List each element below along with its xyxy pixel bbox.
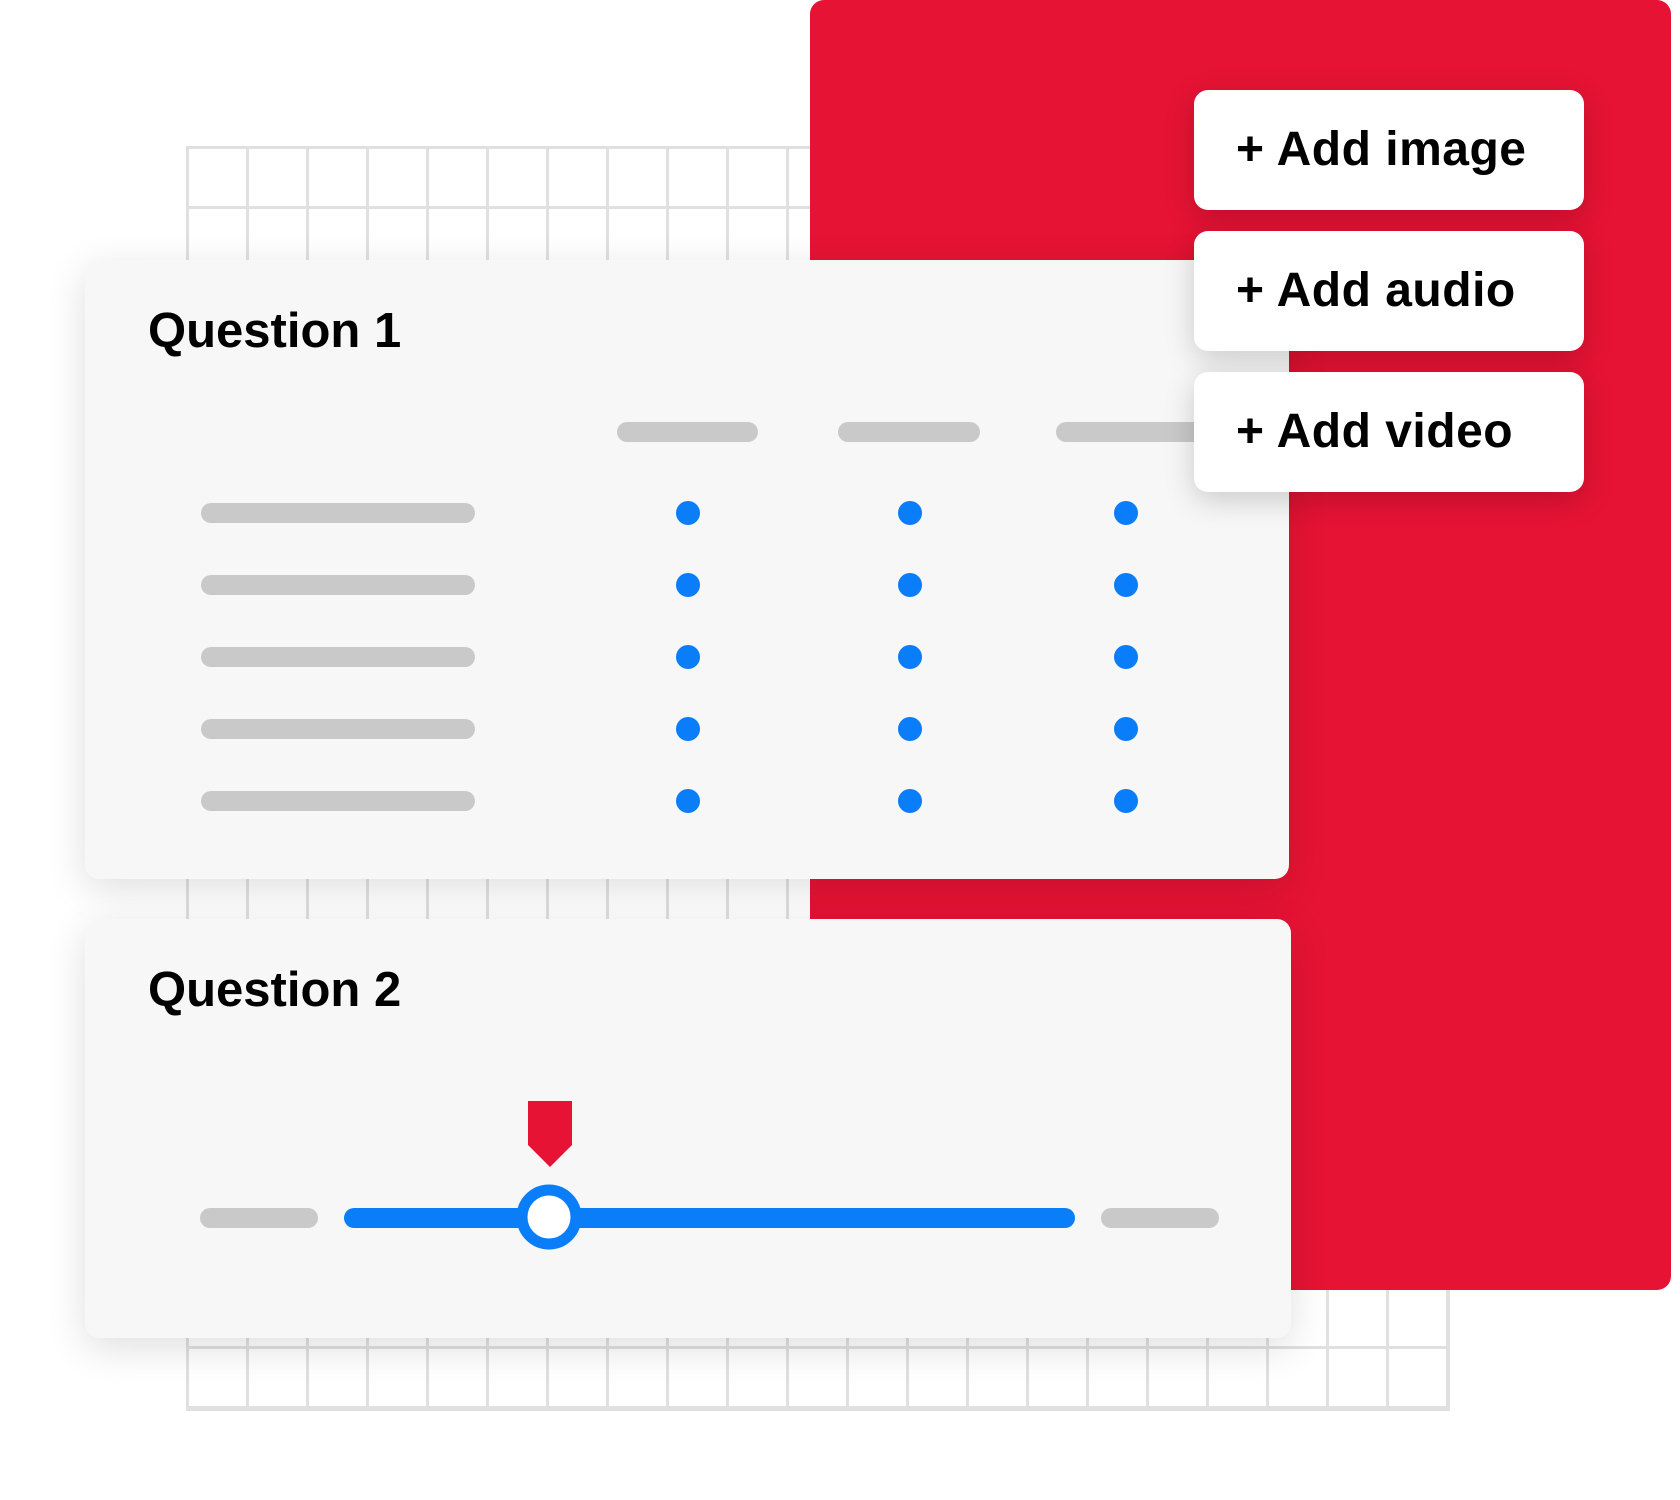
heading: Question 2: Question 2 bbox=[148, 963, 401, 1017]
column header bars bbox=[617, 422, 1194, 442]
button: add audio bbox=[1194, 231, 1584, 351]
button: add audio: + Add audio bbox=[1236, 264, 1516, 317]
marker bbox=[528, 1101, 572, 1167]
slider bbox=[200, 1101, 1219, 1250]
button: add image: + Add image bbox=[1236, 123, 1526, 176]
card: question 1 bbox=[85, 260, 1289, 879]
matrix rows bbox=[201, 501, 1138, 813]
button: add video: + Add video bbox=[1236, 405, 1513, 458]
background grid bbox=[186, 146, 1450, 1411]
card: question 2 bbox=[85, 919, 1291, 1338]
button: add image bbox=[1194, 90, 1584, 210]
red panel bbox=[810, 0, 1671, 1290]
heading: Question 1: Question 1 bbox=[148, 304, 401, 358]
button: add video bbox=[1194, 372, 1584, 492]
